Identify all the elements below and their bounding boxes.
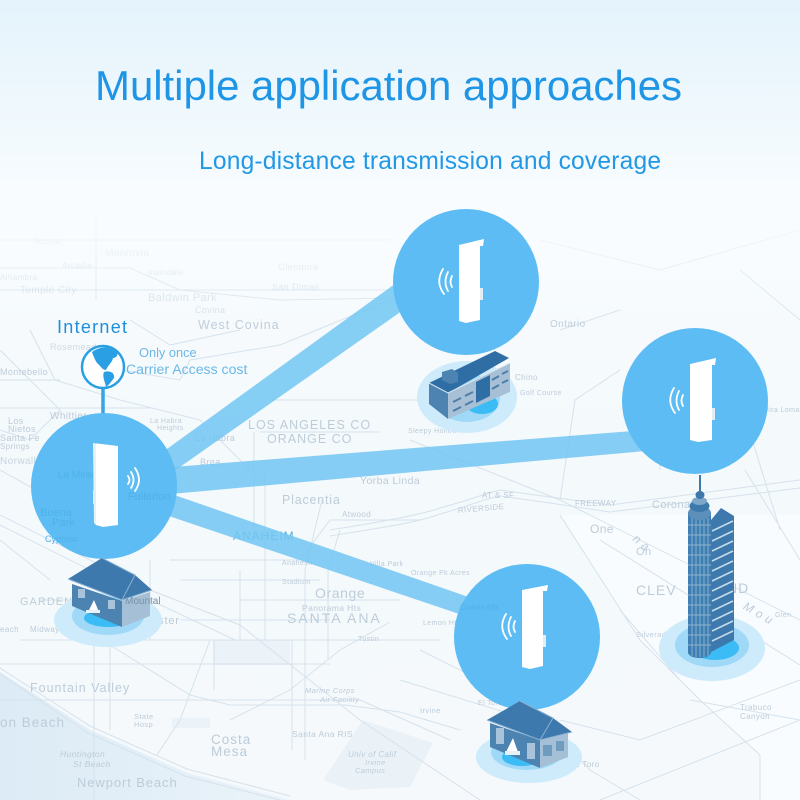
skyscraper (659, 475, 765, 681)
beam: link to house (160, 490, 480, 621)
node: main access point: Fullerton (128, 491, 171, 503)
map labels: Irvine (420, 706, 441, 715)
node: main access point: Park (52, 517, 75, 529)
map labels: St Beach (73, 759, 111, 769)
map labels: Mira Loma (763, 407, 800, 414)
map labels: El Toro MCAS (478, 700, 527, 707)
map labels: Mesa (211, 744, 248, 759)
map labels: Orange Pk Acres (411, 570, 470, 577)
map labels: Atwood (342, 510, 371, 519)
access cost note: Only once (139, 345, 197, 360)
map labels: Temple City (20, 285, 77, 296)
node: main access point: Buena (40, 507, 73, 519)
icon: wifi waves (502, 614, 515, 639)
node: main access point: La Mirada (58, 470, 103, 481)
map labels: AT & SF (482, 491, 514, 500)
internet label: Internet (57, 317, 127, 337)
office building (417, 351, 517, 433)
map labels: Irwindale (148, 268, 184, 277)
map labels: Brea (200, 457, 221, 467)
map labels: M o u (741, 599, 776, 627)
map labels: La Habra (195, 433, 235, 443)
device: office (459, 239, 484, 323)
map labels: Heights (157, 425, 184, 432)
map labels: Baldwin Park (148, 292, 217, 304)
map labels: Covina (195, 305, 225, 315)
map labels: Glen (775, 612, 791, 619)
map labels: Placentia (282, 493, 341, 507)
map labels: Glendora (278, 262, 318, 272)
map labels: Anaheim (282, 560, 312, 567)
map labels: GARDEN (20, 596, 73, 608)
map labels: ORANGE CO (267, 432, 352, 446)
node: main access point: Cypress (45, 534, 79, 544)
map labels: FREEWAY (575, 499, 617, 508)
beam: link to office (160, 273, 416, 474)
map labels: Ontario (550, 319, 586, 330)
map labels: Golf Course (520, 390, 562, 397)
icon: wifi waves (128, 468, 139, 491)
map labels: State (134, 712, 154, 721)
house: remote site (476, 701, 582, 783)
map labels: n a (630, 532, 653, 554)
map labels: La Habra (150, 418, 182, 425)
icon: wifi waves (670, 388, 683, 413)
map labels: West Covina (198, 318, 280, 332)
map labels: Canyon (740, 712, 770, 721)
map labels: Springs (0, 442, 30, 451)
map labels: each (0, 625, 19, 634)
map labels: One (590, 522, 614, 536)
map labels: Westminster (110, 615, 180, 627)
map labels: LOS ANGELES CO (248, 418, 371, 432)
map labels: Villa Park (370, 561, 404, 568)
map labels: Chino (515, 373, 538, 382)
map labels: Orange (315, 585, 365, 601)
map labels: Sleepy Hollow (408, 428, 458, 435)
map labels: on Beach (0, 715, 65, 730)
map labels: Norwalk (0, 456, 40, 467)
map labels: Huntington (60, 749, 105, 759)
map labels: Montebello (0, 367, 48, 377)
map labels: Stadium (282, 579, 310, 586)
node: house access point: Cowan Hts (460, 603, 499, 612)
beam: link to tower (160, 430, 645, 495)
map labels: Rosemead (50, 342, 97, 352)
map labels: Lemon Hts (423, 620, 461, 627)
map labels: Alhambra (0, 273, 38, 282)
map labels: Marine Corps (305, 686, 355, 695)
map labels: Fountain Valley (30, 681, 130, 695)
map labels: On (636, 546, 651, 558)
icon: wifi waves (439, 269, 452, 294)
title: Multiple application approaches (95, 62, 682, 109)
map labels: Corona (652, 499, 691, 511)
map labels: Panorama Hts (302, 603, 361, 613)
map labels: Whittier (50, 411, 87, 422)
house: main site (54, 558, 162, 647)
map labels: Midway City (30, 625, 78, 634)
map labels: Campus (355, 766, 385, 775)
subtitle: Long-distance transmission and coverage (199, 148, 661, 175)
map labels (0, 236, 800, 790)
device: main (93, 443, 118, 527)
map labels: Los (8, 416, 24, 426)
map labels: Irvine (365, 758, 386, 767)
map labels: Arcadia (62, 261, 92, 270)
node: main access point (31, 413, 177, 559)
map labels: SANTA ANA (287, 610, 382, 626)
map labels: Prado Dam (650, 440, 689, 447)
map labels: Santa Ana RIS (292, 729, 353, 739)
map labels: Newport Beach (77, 775, 178, 790)
map labels: Air Facility (319, 695, 360, 704)
device: tower (690, 358, 716, 442)
node: office access point (393, 209, 539, 355)
map labels: ANAHEIM (233, 529, 295, 543)
map labels: Nietos (8, 424, 36, 434)
device: house (522, 585, 548, 669)
map labels: Monrovia (105, 248, 149, 259)
access cost note: Carrier Access cost (126, 361, 247, 377)
node: tower access point (622, 328, 768, 474)
access cost note (126, 345, 247, 377)
map labels: RIVERSIDE (457, 502, 505, 515)
node: house access point (454, 564, 600, 710)
map labels: CLEV (636, 582, 677, 598)
map labels: El Toro (572, 760, 600, 769)
map labels: Univ of Calif (348, 750, 397, 759)
internet globe (82, 346, 124, 414)
map labels: San Dimas (272, 282, 320, 292)
map labels: Silverado (636, 630, 671, 639)
map labels: Yorba Linda (360, 475, 420, 487)
map labels: Santa Fe (0, 433, 40, 443)
map labels: Costa (211, 732, 251, 747)
map labels: ND (727, 580, 749, 596)
map labels: Trabuco (740, 703, 772, 712)
background street map (0, 180, 800, 800)
map labels: Hosp (134, 720, 153, 729)
map labels: Azusa (34, 236, 61, 246)
house: main site: Mountal (125, 596, 161, 607)
map labels: Tustin (358, 636, 379, 643)
